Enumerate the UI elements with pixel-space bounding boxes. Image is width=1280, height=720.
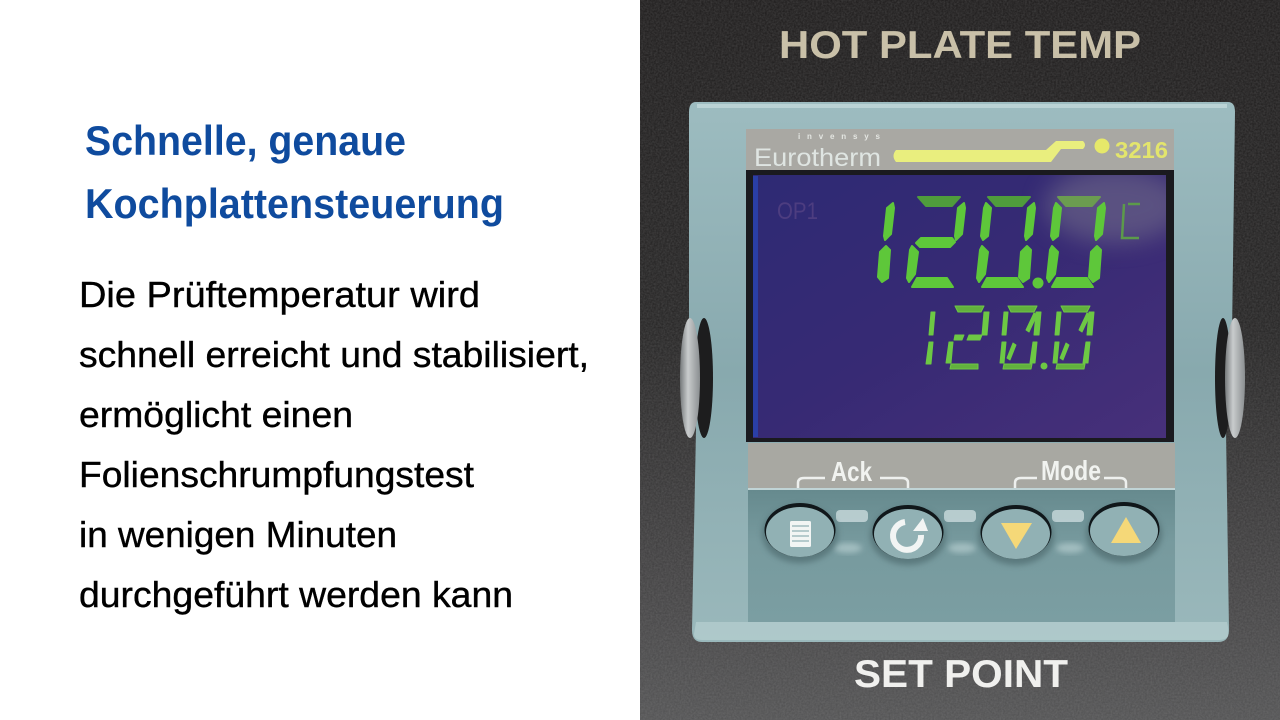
indicator dot: [1094, 138, 1110, 154]
panel: text column: [0, 0, 640, 720]
ack label: Ack: [831, 456, 872, 487]
brand owner: invensys: [798, 132, 881, 141]
mode label: Mode: [1041, 455, 1101, 486]
body text: ermöglicht einen: [79, 394, 353, 435]
heading: Schnelle, genaue: [85, 117, 406, 164]
decimal point: [1034, 278, 1042, 288]
unit symbol: [1122, 204, 1140, 238]
measured temperature 120.0: [878, 197, 1105, 288]
key label strip: [748, 443, 1175, 488]
mode bracket: [1015, 478, 1126, 488]
digit 2: [907, 197, 965, 287]
digit 1: [878, 203, 894, 282]
label: hot plate temp: HOT PLATE TEMP: [779, 24, 1141, 67]
lcd display: [753, 167, 1185, 438]
side clip right: [1215, 318, 1245, 438]
icon: page: [790, 521, 811, 547]
digit 0: [1047, 197, 1105, 287]
button: down: [978, 505, 1054, 565]
digit 2: [946, 306, 989, 369]
icon: circular arrow: [893, 518, 928, 550]
body text: Die Prüftemperatur wird: [79, 274, 480, 315]
body text: durchgeführt werden kann: [79, 574, 513, 615]
yellow swoosh: [894, 141, 1085, 162]
icon: up triangle: [1111, 517, 1141, 543]
panel: controller photo: [640, 0, 1280, 720]
digit 0: [1000, 306, 1041, 369]
digit 0: [1053, 306, 1094, 369]
display surround: [746, 170, 1174, 442]
set point temperature 120.0: [926, 306, 1094, 369]
body text: schnell erreicht und stabilisiert,: [79, 334, 589, 375]
body text: in wenigen Minuten: [79, 514, 397, 555]
digit 0: [977, 197, 1035, 287]
button: page: [762, 503, 838, 563]
decimal point: [1041, 363, 1047, 369]
heading: Kochplattensteuerung: [85, 180, 504, 227]
label: set point: SET POINT: [854, 653, 1068, 696]
button: scroll: [870, 505, 946, 565]
model number: 3216: [1115, 137, 1168, 163]
heading: [85, 117, 504, 227]
ack bracket: [798, 478, 908, 488]
controller bezel: [689, 102, 1235, 642]
side clip left: [680, 318, 713, 438]
output label: OP1: [777, 198, 818, 225]
body text: [79, 274, 589, 615]
icon: down triangle: [1001, 523, 1032, 549]
key panel: [748, 488, 1175, 622]
brand strip: [746, 129, 1174, 172]
body text: Folienschrumpfungstest: [79, 454, 474, 495]
button: up: [1086, 502, 1162, 563]
brand name: Eurotherm: [754, 144, 881, 172]
digit 1: [926, 312, 935, 364]
